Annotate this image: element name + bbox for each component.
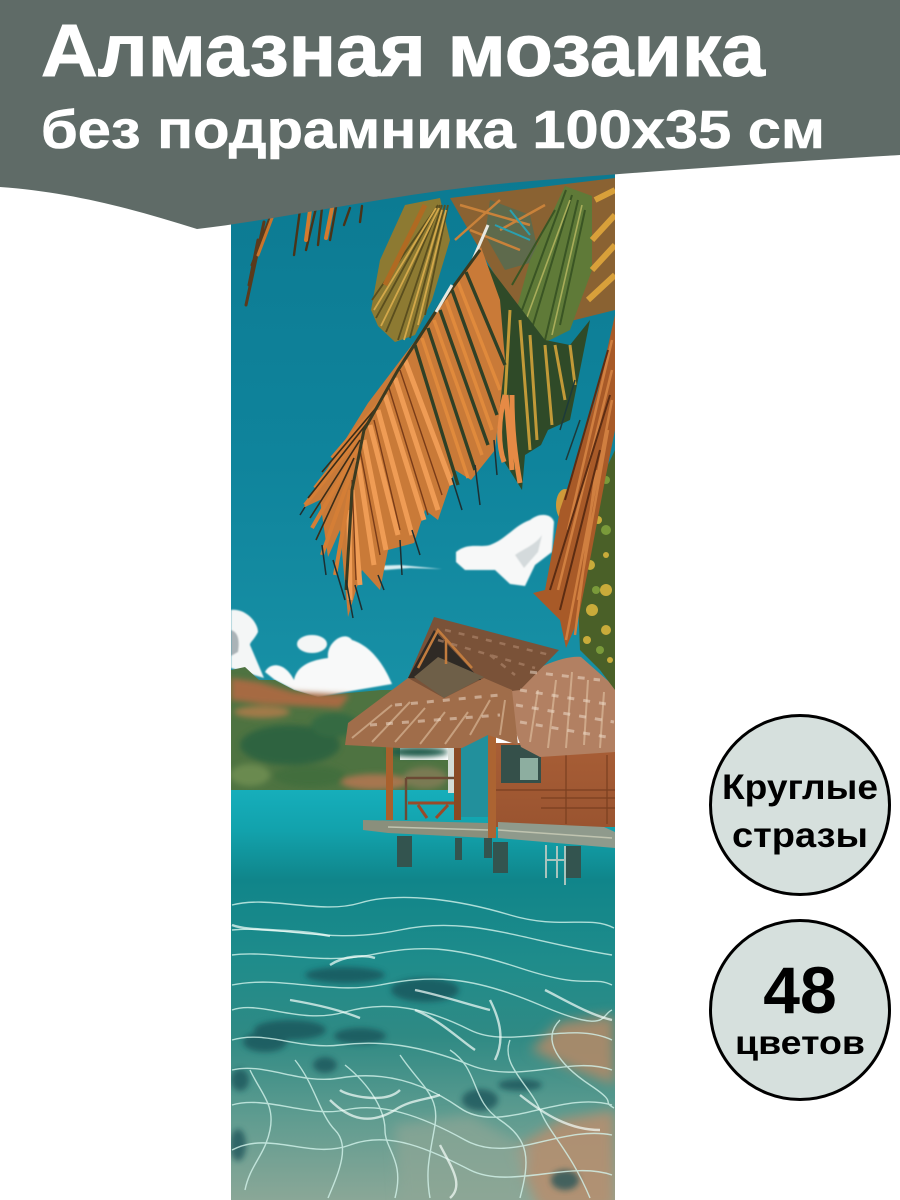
badge: 48 colours: 48 (763, 953, 837, 1027)
posts (386, 745, 393, 820)
picture: tropical bungalow scene (230, 170, 615, 1200)
badge: 48 colours (710, 920, 890, 1100)
front thatched roof (345, 678, 518, 748)
railing and bench (406, 778, 454, 820)
wall (496, 743, 615, 827)
water ripples (232, 897, 614, 1198)
subtitle: без подрамника 100х35 см (41, 100, 825, 160)
frond: main orange (300, 247, 505, 618)
title: Алмазная мозаика (41, 9, 766, 92)
hut stilts (397, 836, 581, 878)
frond: right hanging (533, 315, 615, 648)
door (461, 735, 488, 817)
badge: round rhinestones: Круглые (722, 768, 878, 807)
frond: top left (246, 206, 362, 305)
frond: top centre (371, 198, 450, 342)
thatch highlights (352, 672, 604, 748)
frond: top right tangle (450, 178, 615, 345)
clouds (231, 515, 554, 697)
badge: 48 colours: цветов (735, 1024, 865, 1061)
right thatched roof (510, 657, 615, 757)
sea water (231, 790, 615, 1200)
dark submerged stones (230, 967, 579, 1190)
sky (231, 170, 615, 700)
foliage: green and yellow (556, 450, 615, 690)
window (501, 745, 541, 783)
deck (363, 820, 488, 838)
header banner (0, 0, 900, 229)
badge: round rhinestones (710, 716, 890, 894)
badge: round rhinestones: стразы (732, 816, 868, 855)
sandy shallows (395, 1015, 615, 1200)
distant hill (230, 667, 448, 792)
upper thatched roof (408, 617, 559, 700)
bungalow (345, 617, 615, 885)
gable (408, 630, 481, 680)
palm fronds (246, 178, 615, 690)
frond: centre hanging (480, 255, 590, 490)
white wall strip (448, 748, 454, 793)
ladder (546, 845, 565, 885)
